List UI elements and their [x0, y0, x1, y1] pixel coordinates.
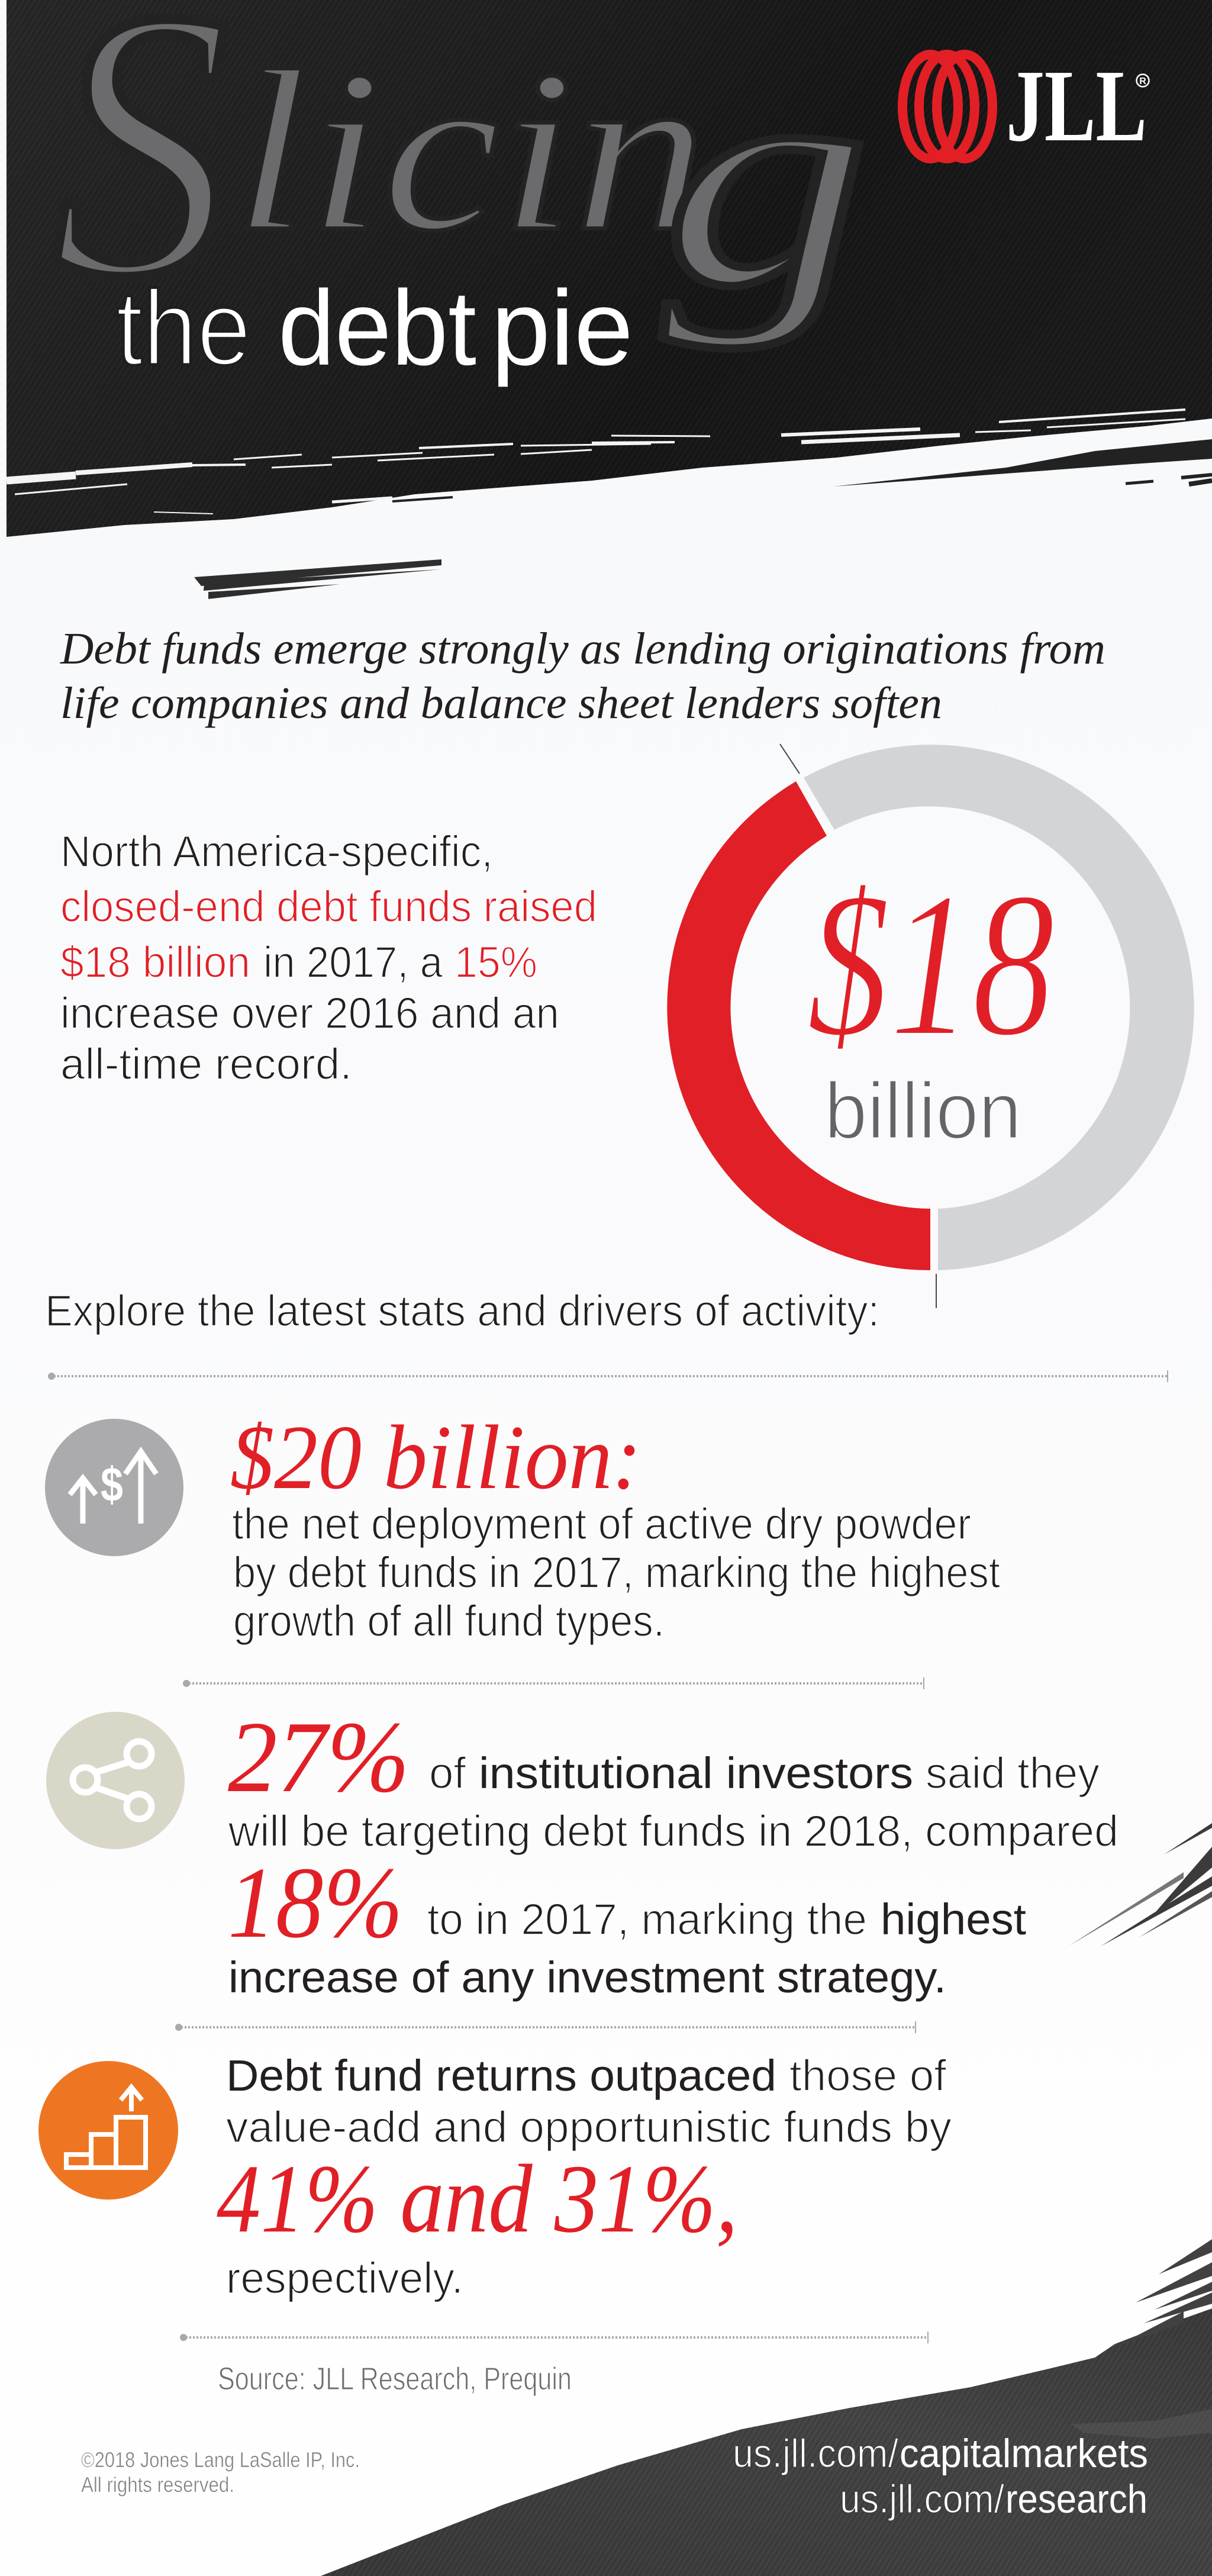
title: the debt pie: debt — [278, 269, 476, 388]
copyright — [81, 2448, 360, 2497]
line 1 text: of — [429, 1749, 466, 1798]
icon: red ribbon rings — [902, 54, 992, 159]
subheading: Debt funds emerge strongly as lending originations from — [60, 624, 1105, 674]
description — [232, 1499, 1000, 1646]
line 4 text: increase of any investment strategy. — [228, 1953, 946, 2002]
copyright: ©2018 Jones Lang LaSalle IP, Inc. — [81, 2448, 360, 2472]
icon: share nodes — [46, 1712, 185, 1849]
line 3 text: to in 2017, marking the — [427, 1895, 867, 1944]
red segment — [667, 781, 930, 1270]
tick marks — [780, 744, 936, 1308]
footer links: us.jll.com/ — [840, 2477, 1004, 2522]
line 2 text: value-add and opportunistic funds by — [226, 2102, 952, 2152]
value: $18 — [807, 849, 1055, 1079]
footer links: us.jll.com/ — [733, 2431, 898, 2476]
line 1 text — [429, 1749, 1100, 1798]
brush stroke mark — [194, 559, 441, 599]
registered mark: R — [1139, 76, 1146, 86]
footer links: research — [1005, 2477, 1147, 2522]
brush strokes right — [1069, 1823, 1212, 1946]
title: Slicing: licin — [234, 23, 707, 279]
JLL logo — [902, 49, 1149, 163]
line 2 text: will be targeting debt funds in 2018, compared — [228, 1807, 1118, 1856]
intro text block: North America-specific, — [60, 827, 493, 876]
title: the debt pie — [116, 269, 633, 388]
description: the net deployment of active dry powder — [232, 1499, 971, 1548]
subheading — [60, 624, 1105, 728]
stat 1: $20 billion — [45, 1406, 1000, 1646]
line 1 text: Debt fund returns outpaced — [226, 2051, 776, 2100]
divider — [48, 1370, 1168, 1382]
icon: rising steps — [38, 2061, 178, 2200]
icon: dollar arrows: $ — [101, 1458, 123, 1512]
registered mark — [1136, 75, 1149, 86]
intro text block: in 2017, a — [263, 938, 443, 987]
figures: 41% and 31%: 41% and 31%, — [217, 2144, 738, 2253]
title: the debt pie: the — [116, 269, 251, 388]
description: by debt funds in 2017, marking the highest — [233, 1548, 1000, 1597]
donut chart: $18 billion — [667, 744, 1194, 1308]
source note: Source: JLL Research, Prequin — [218, 2361, 572, 2397]
intro text block — [60, 827, 597, 1089]
line 3 text: highest — [881, 1895, 1026, 1944]
divider — [180, 2332, 928, 2343]
title: the debt pie: pie — [491, 269, 633, 388]
headline figure: $20 billion: — [230, 1406, 642, 1508]
stat 3: debt fund returns — [38, 2051, 952, 2303]
line 1 text: those of — [789, 2051, 946, 2100]
line 1 text: institutional investors — [479, 1749, 913, 1798]
intro text block: 15% — [454, 938, 537, 987]
footer links: capitalmarkets — [900, 2431, 1148, 2476]
intro text block: closed-end debt funds raised — [60, 882, 597, 931]
header ink brush panel — [7, 0, 1212, 537]
subheading: life companies and balance sheet lenders soften — [60, 678, 942, 728]
intro text block: $18 billion — [60, 938, 250, 987]
line 1 text: said they — [926, 1749, 1100, 1798]
divider — [183, 1677, 924, 1689]
figure: 18%: 18% — [228, 1847, 403, 1959]
copyright: All rights reserved. — [81, 2472, 234, 2497]
divider — [175, 2021, 916, 2033]
intro text block: increase over 2016 and an — [60, 988, 559, 1038]
icon: dollar arrows — [45, 1419, 183, 1556]
section lead-in: Explore the latest stats and drivers of activity: — [45, 1286, 879, 1335]
stat 2: 27% vs 18% — [46, 1701, 1118, 2002]
gray segment — [804, 745, 1194, 1270]
footer ink brush panel — [321, 2239, 1212, 2576]
footer links — [733, 2431, 1148, 2522]
description: growth of all fund types. — [233, 1596, 665, 1646]
intro text block: all-time record. — [60, 1039, 352, 1089]
title: Slicing — [52, 0, 870, 357]
line 4 text: respectively. — [226, 2253, 463, 2303]
figure: 27%: 27% — [228, 1701, 410, 1814]
unit: billion — [824, 1066, 1021, 1155]
title: Slicing: g — [663, 9, 870, 350]
wordmark: JLL — [1006, 49, 1147, 163]
